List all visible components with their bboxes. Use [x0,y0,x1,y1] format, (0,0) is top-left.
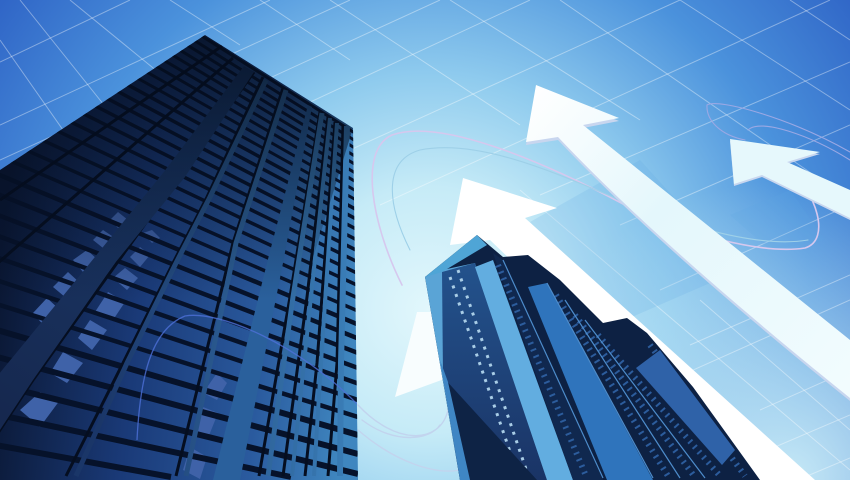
glass band [475,260,573,480]
arrow: center [450,178,815,480]
roof highlight [425,235,487,277]
tower silhouette [425,235,760,480]
reflected ring [137,315,358,440]
lower shadow wedge [443,377,537,480]
lower left glass [440,360,470,480]
top shade [0,35,353,300]
arrow: lower left [395,312,447,397]
left tower [0,0,360,480]
dark window face [442,263,547,480]
floor lines upper [137,36,354,200]
floor lines middle [10,84,356,312]
floor lines bottom [0,328,358,477]
rib lines [503,260,705,478]
arrow: large upper [526,85,850,401]
orbit rings behind arrows [358,104,850,471]
window columns [450,270,527,472]
floor lines lower [0,171,358,417]
third panel [636,350,735,465]
corner glass [425,263,547,480]
lit windows [20,212,227,479]
tower facade base [0,0,360,480]
right tower [425,235,760,480]
blue band [528,283,653,480]
tinted glass shadows [530,160,825,320]
ribbed face one [493,253,603,480]
rib windows [498,265,745,476]
dark column gaps [0,46,343,476]
arrow: small right [730,139,850,220]
narrow columns [76,80,347,476]
wide column B [213,105,312,480]
wide column A [0,66,254,445]
